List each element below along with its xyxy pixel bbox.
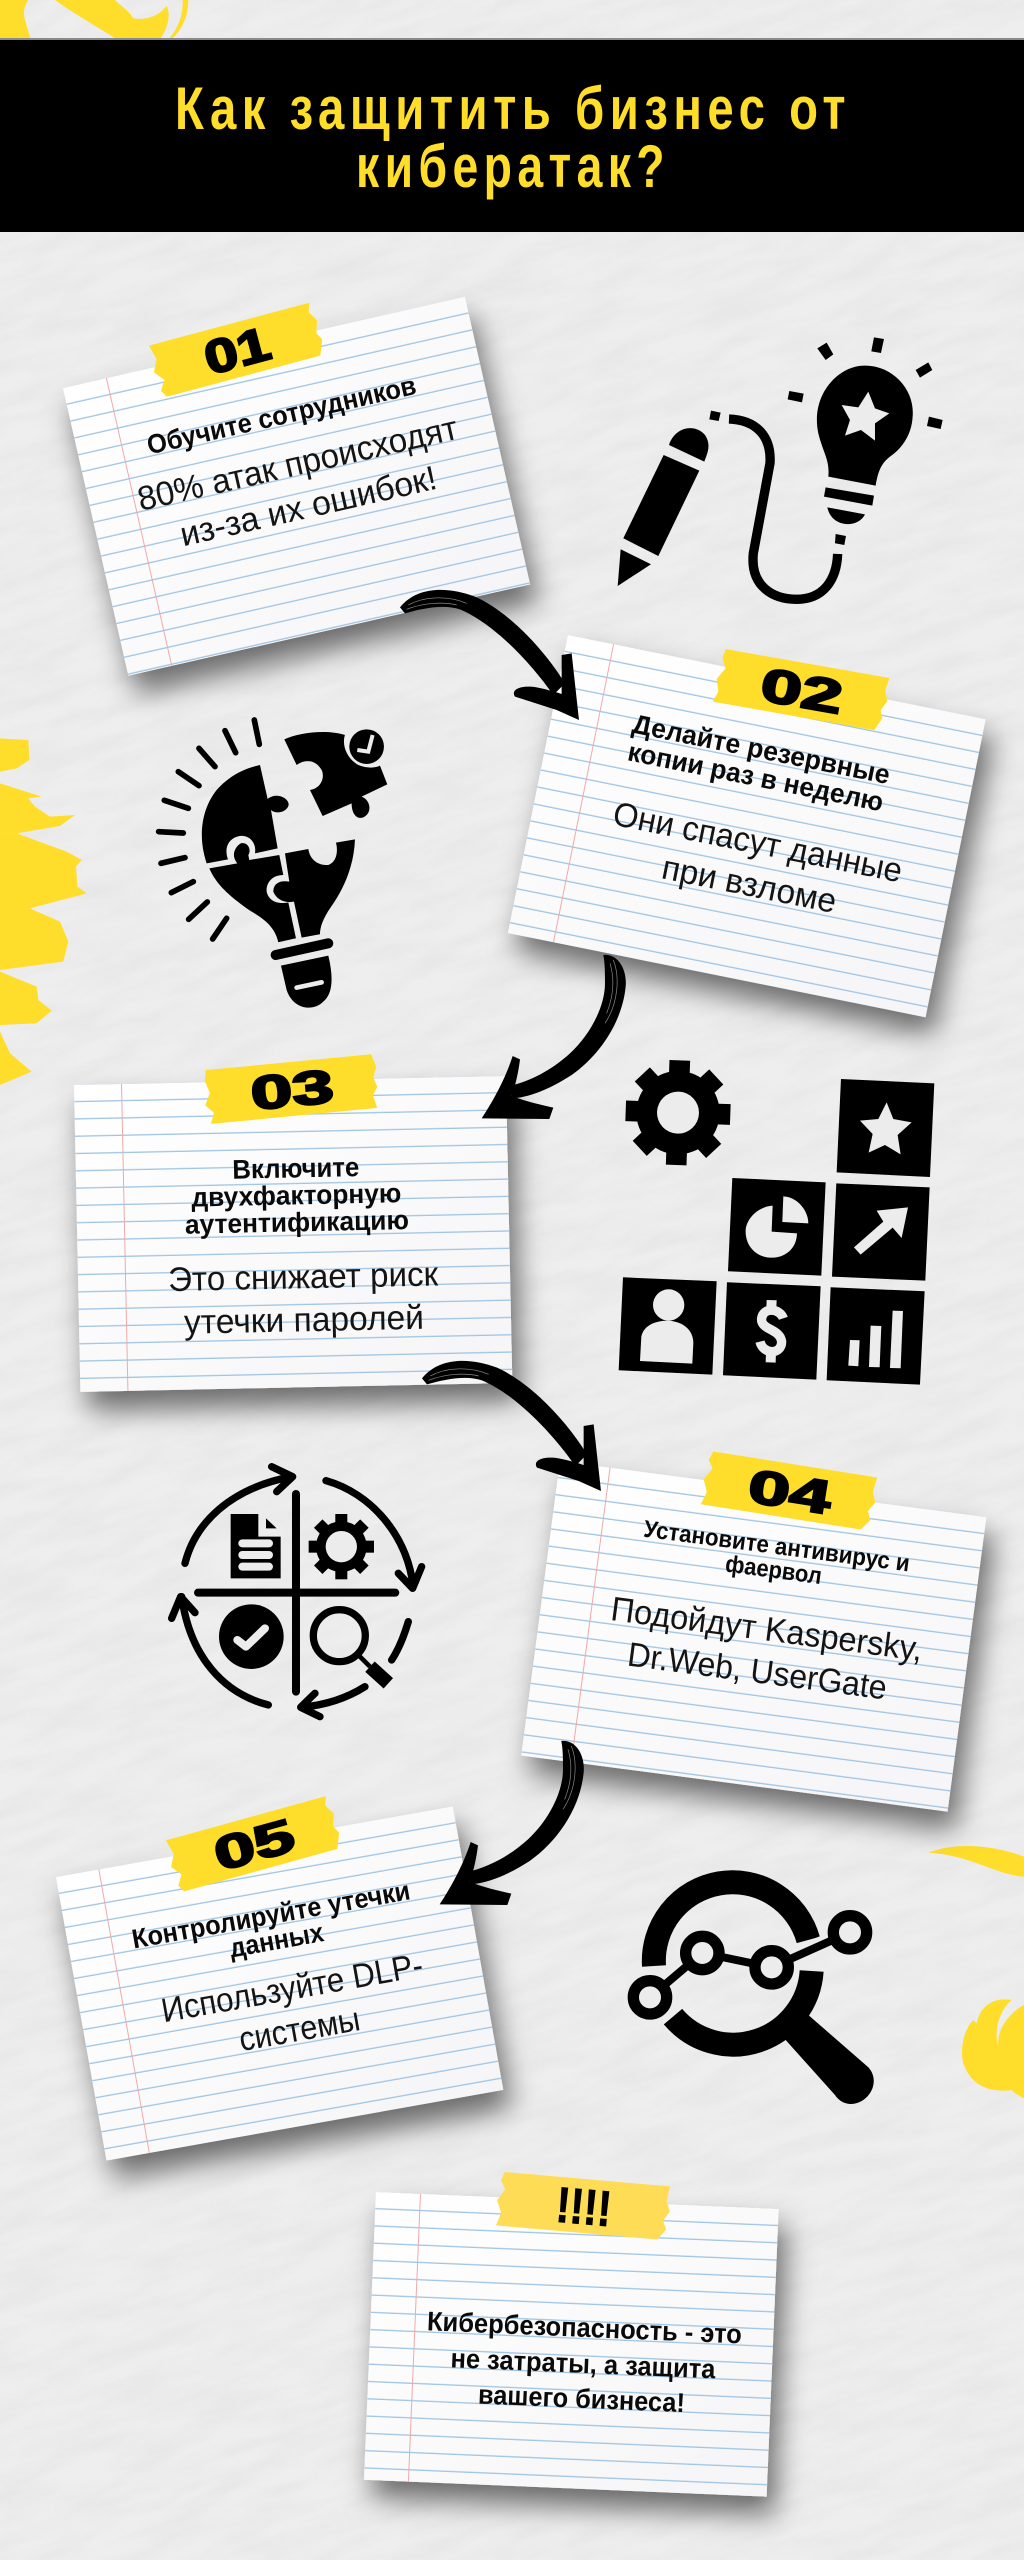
star — [842, 392, 889, 441]
rays — [159, 720, 259, 939]
bulb base — [276, 943, 328, 955]
text: step 1: 80% атак происходят — [134, 409, 461, 519]
gear — [309, 1514, 374, 1579]
cycle arrows — [172, 1467, 422, 1717]
tile: pie chart — [728, 1178, 826, 1276]
tape: 04 — [700, 1451, 879, 1531]
text: step 3 — [168, 1255, 440, 1342]
text: conclusion: вашего бизнеса! — [477, 2379, 686, 2418]
document — [231, 1514, 281, 1578]
arrow: 1 to 2 — [400, 590, 579, 720]
tape: exclamation: !!!! — [554, 2177, 614, 2237]
tape: 04: 04 — [745, 1459, 835, 1524]
heading: step 2: Делайте резервные — [630, 709, 893, 790]
check circle — [219, 1604, 284, 1669]
magnifier — [313, 1610, 388, 1683]
clock — [349, 729, 384, 764]
panel: note 1 — [63, 297, 530, 676]
text: step 4: Dr.Web, UserGate — [625, 1636, 889, 1707]
tape: 05 — [164, 1795, 343, 1893]
decorative yellow brush left — [0, 738, 87, 1085]
text: step 2 — [601, 795, 906, 932]
title — [175, 75, 851, 200]
bulb — [709, 337, 943, 545]
heading: step 5: Контролируйте утечки — [130, 1875, 412, 1954]
tape: 02 — [713, 648, 891, 732]
tile: star — [837, 1079, 934, 1177]
icon: gear and business tiles — [619, 1059, 934, 1385]
panel: note 5 — [56, 1795, 503, 2161]
arrow: 3 to 4 — [422, 1361, 601, 1491]
decorative yellow brush top left — [0, 0, 188, 39]
tile: bar chart — [827, 1287, 925, 1385]
handle — [785, 2015, 874, 2104]
text: step 5: Используйте DLP- — [158, 1946, 426, 2030]
heading: step 3: Включите — [232, 1152, 360, 1185]
panel: note 2 — [508, 635, 986, 1017]
puzzle pieces — [202, 732, 387, 942]
decorative yellow brush right — [928, 1846, 1024, 2098]
text: step 2: при взломе — [659, 849, 840, 921]
text: step 1: из-за их ошибок! — [176, 459, 440, 554]
gear — [624, 1059, 732, 1167]
tile: person — [619, 1277, 717, 1375]
icon: magnifier with graph — [624, 1882, 874, 2104]
arrow: 4 to 5 — [440, 1741, 584, 1905]
heading: step 5: данных — [227, 1917, 326, 1963]
pencil — [618, 428, 709, 586]
icon: pencil and light bulb — [618, 337, 943, 599]
tile: dollar — [723, 1282, 821, 1380]
lens — [654, 1882, 812, 2045]
tile: growth arrow — [832, 1183, 930, 1281]
text: step 5 — [158, 1946, 433, 2072]
text: step 3: утечки паролей — [184, 1299, 424, 1342]
text: step 5: системы — [236, 2000, 363, 2059]
heading: step 3: аутентификацию — [185, 1205, 409, 1240]
title: Как защитить бизнес от — [175, 75, 851, 142]
heading: step 4: Установите антивирус и — [642, 1516, 911, 1577]
heading: step 3 — [184, 1151, 409, 1240]
heading: step 2: копии раз в неделю — [625, 736, 886, 817]
panel: note 3 — [74, 1054, 512, 1392]
text: step 4 — [603, 1590, 925, 1711]
tape: 01: 01 — [198, 316, 276, 385]
text: conclusion: Кибербезопасность - это — [427, 2306, 742, 2349]
text: step 2: Они спасут данные — [610, 795, 906, 890]
text: step 4: Подойдут Kaspersky, — [609, 1590, 925, 1669]
heading: step 3: двухфакторную — [191, 1178, 402, 1213]
tape: 03: 03 — [248, 1059, 336, 1120]
text: conclusion: не затраты, а защита — [450, 2343, 717, 2384]
panel: note 4 — [521, 1451, 986, 1812]
heading: step 4: фаервол — [724, 1551, 823, 1590]
tape: 03 — [202, 1054, 380, 1124]
tape: 01 — [147, 302, 326, 398]
graph — [624, 1916, 867, 2023]
title: кибератак? — [356, 133, 670, 200]
header band — [0, 38, 1024, 232]
text: step 3: Это снижает риск — [168, 1255, 440, 1299]
tape: 05: 05 — [208, 1808, 300, 1881]
panel: conclusion note — [364, 2172, 779, 2497]
text: conclusion — [424, 2306, 742, 2420]
cord — [729, 419, 838, 599]
arrow: 2 to 3 — [482, 955, 626, 1119]
tape: exclamation — [495, 2172, 672, 2242]
icon: puzzle light bulb — [159, 720, 387, 1008]
cross — [198, 1494, 395, 1692]
icon: process cycle — [172, 1467, 422, 1717]
heading: step 1: Обучите сотрудников — [144, 370, 419, 460]
tape: 02: 02 — [757, 657, 847, 724]
